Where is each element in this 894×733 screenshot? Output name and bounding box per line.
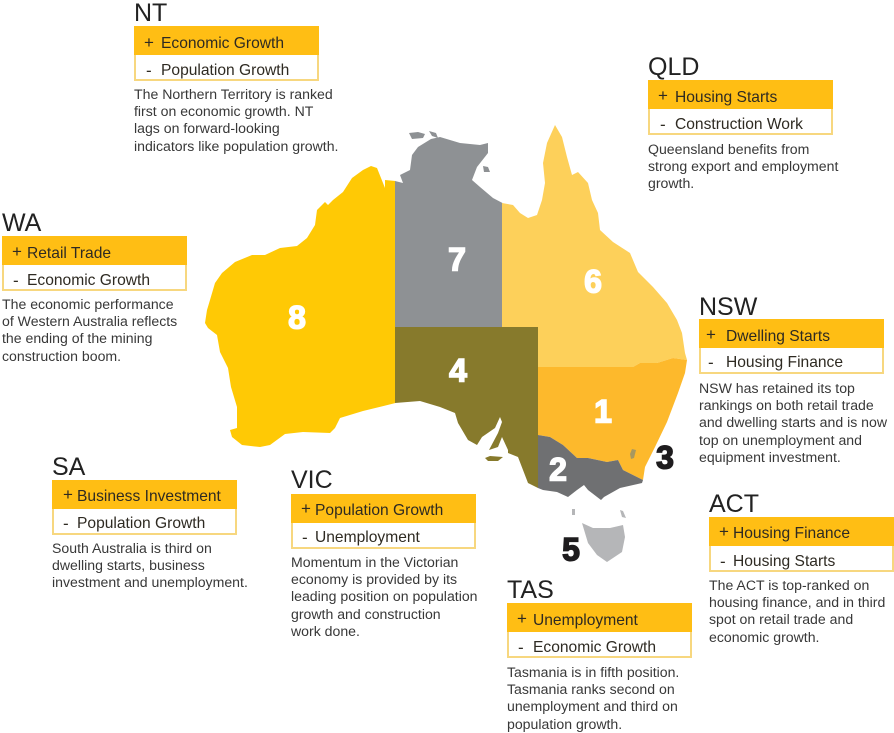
heading: SA: SA <box>52 453 85 481</box>
region: Queensland <box>502 125 687 367</box>
panel: SA <box>52 453 248 590</box>
description: ACT: housing finance, and in third <box>709 594 885 610</box>
region: Western Australia <box>205 166 396 447</box>
panel: ACT <box>709 490 894 645</box>
description: SA <box>52 540 248 590</box>
description: NSW: top on unemployment and <box>699 432 862 448</box>
rank number 3: 3 <box>656 440 674 476</box>
indicator box: VIC <box>291 494 476 549</box>
indicator box: SA <box>52 480 237 535</box>
indicator box: SA: + <box>63 485 73 504</box>
indicator box: SA: Business Investment <box>77 488 221 505</box>
panel: VIC <box>291 466 478 639</box>
description: WA <box>2 296 177 364</box>
indicator box: SA: Population Growth <box>77 515 205 532</box>
indicator box: ACT: - <box>720 552 726 571</box>
description: NSW: equipment investment. <box>699 449 841 465</box>
region: South Australia <box>395 327 538 488</box>
indicator box: ACT: + <box>719 522 729 541</box>
indicator box: TAS <box>507 603 692 658</box>
indicator box: WA <box>2 236 187 291</box>
description: QLD: strong export and employment <box>648 158 838 174</box>
panel: NT <box>134 0 338 154</box>
heading: TAS: TAS <box>507 576 554 604</box>
indicator box: QLD: Construction Work <box>675 116 803 133</box>
description: SA: South Australia is third on <box>52 540 212 556</box>
description: SA: investment and unemployment. <box>52 574 248 590</box>
panel: WA <box>2 209 187 364</box>
description: TAS: Tasmania ranks second on <box>507 681 675 697</box>
indicator box: ACT <box>709 517 894 572</box>
description: QLD: Queensland benefits from <box>648 140 809 156</box>
rank number 7: 7 <box>448 242 466 278</box>
description: TAS: population growth. <box>507 716 622 732</box>
rank number 4: 4 <box>449 352 467 388</box>
indicator box: QLD: + <box>658 86 668 105</box>
indicator box: WA: Retail Trade <box>27 245 111 262</box>
heading: QLD: QLD <box>648 53 699 81</box>
indicator box: NT: Economic Growth <box>161 35 284 52</box>
description: QLD <box>648 140 838 191</box>
indicator box: NT: + <box>144 33 154 52</box>
rank number 2: 2 <box>549 452 567 488</box>
description: ACT: economic growth. <box>709 629 819 645</box>
indicator box: TAS: + <box>517 609 527 628</box>
rank number 1: 1 <box>594 394 612 430</box>
description: VIC <box>291 554 478 639</box>
description: TAS <box>507 664 679 732</box>
indicator box: NSW: Housing Finance <box>726 354 843 371</box>
indicator box: TAS: Economic Growth <box>533 639 656 656</box>
description: SA: dwelling starts, business <box>52 557 205 573</box>
indicator box: SA: - <box>63 514 69 533</box>
description: ACT: The ACT is top-ranked on <box>709 577 869 593</box>
description: NT: first on economic growth. NT <box>134 103 313 119</box>
description: NT: The Northern Territory is ranked <box>134 86 333 102</box>
indicator box: WA: + <box>12 242 22 261</box>
description: VIC: economy is provided by its <box>291 571 457 587</box>
indicator box: NSW <box>699 319 884 374</box>
indicator box: TAS: - <box>518 638 524 657</box>
description: NT <box>134 86 338 154</box>
indicator box: VIC: - <box>302 528 308 547</box>
rank number 8: 8 <box>288 300 306 336</box>
description: QLD: growth. <box>648 175 694 191</box>
heading: NSW: NSW <box>699 293 757 321</box>
panel: NSW <box>699 293 887 465</box>
description: WA: construction boom. <box>2 348 121 364</box>
indicator box: VIC: Population Growth <box>315 502 443 519</box>
description: ACT: spot on retail trade and <box>709 611 853 627</box>
description: NSW: NSW has retained its top <box>699 380 855 396</box>
indicator box: WA: Economic Growth <box>27 272 150 289</box>
description: TAS: Tasmania is in fifth position. <box>507 664 679 680</box>
indicator box: VIC: + <box>301 499 311 518</box>
panel: QLD <box>648 53 838 191</box>
indicator box: VIC: Unemployment <box>315 529 420 546</box>
indicator box: NT: Population Growth <box>161 62 289 79</box>
indicator box: ACT: Housing Starts <box>733 553 835 570</box>
region: Victoria <box>538 435 643 500</box>
description: NT: lags on forward-looking <box>134 120 280 136</box>
rank number 5: 5 <box>562 532 580 568</box>
indicator box: TAS: Unemployment <box>533 612 638 629</box>
region: Australian Capital Territory <box>630 449 636 459</box>
description: WA: the ending of the mining <box>2 330 152 346</box>
heading: ACT: ACT <box>709 490 759 518</box>
description: WA: of Western Australia reflects <box>2 313 177 329</box>
panel: TAS <box>507 576 692 732</box>
region: Tasmania <box>572 509 626 562</box>
indicator box: NSW: Dwelling Starts <box>726 328 830 345</box>
indicator box: WA: - <box>13 271 19 290</box>
region: New South Wales <box>538 358 687 480</box>
description: NSW: and dwelling starts and is now <box>699 414 887 430</box>
description: WA: The economic performance <box>2 296 174 312</box>
indicator box: ACT: Housing Finance <box>733 525 850 542</box>
description: NT: indicators like population growth. <box>134 138 338 154</box>
description: NSW <box>699 380 887 465</box>
indicator box: QLD: Housing Starts <box>675 89 777 106</box>
description: VIC: Momentum in the Victorian <box>291 554 458 570</box>
description: NSW: rankings on both retail trade <box>699 397 874 413</box>
indicator box: QLD: - <box>660 115 666 134</box>
description: VIC: growth and construction <box>291 606 441 622</box>
heading: VIC: VIC <box>291 466 333 494</box>
indicator box: NSW: - <box>708 353 714 372</box>
rank number 6: 6 <box>584 264 602 300</box>
description: ACT <box>709 577 885 645</box>
description: VIC: leading position on population <box>291 588 478 604</box>
region: Northern Territory <box>395 131 502 328</box>
description: VIC: work done. <box>291 623 360 639</box>
indicator box: NT: - <box>146 61 152 80</box>
indicator box: QLD <box>648 80 833 135</box>
heading: WA: WA <box>2 209 41 237</box>
description: TAS: unemployment and third on <box>507 698 678 714</box>
indicator box: NSW: + <box>706 325 716 344</box>
indicator box: NT <box>134 26 319 81</box>
